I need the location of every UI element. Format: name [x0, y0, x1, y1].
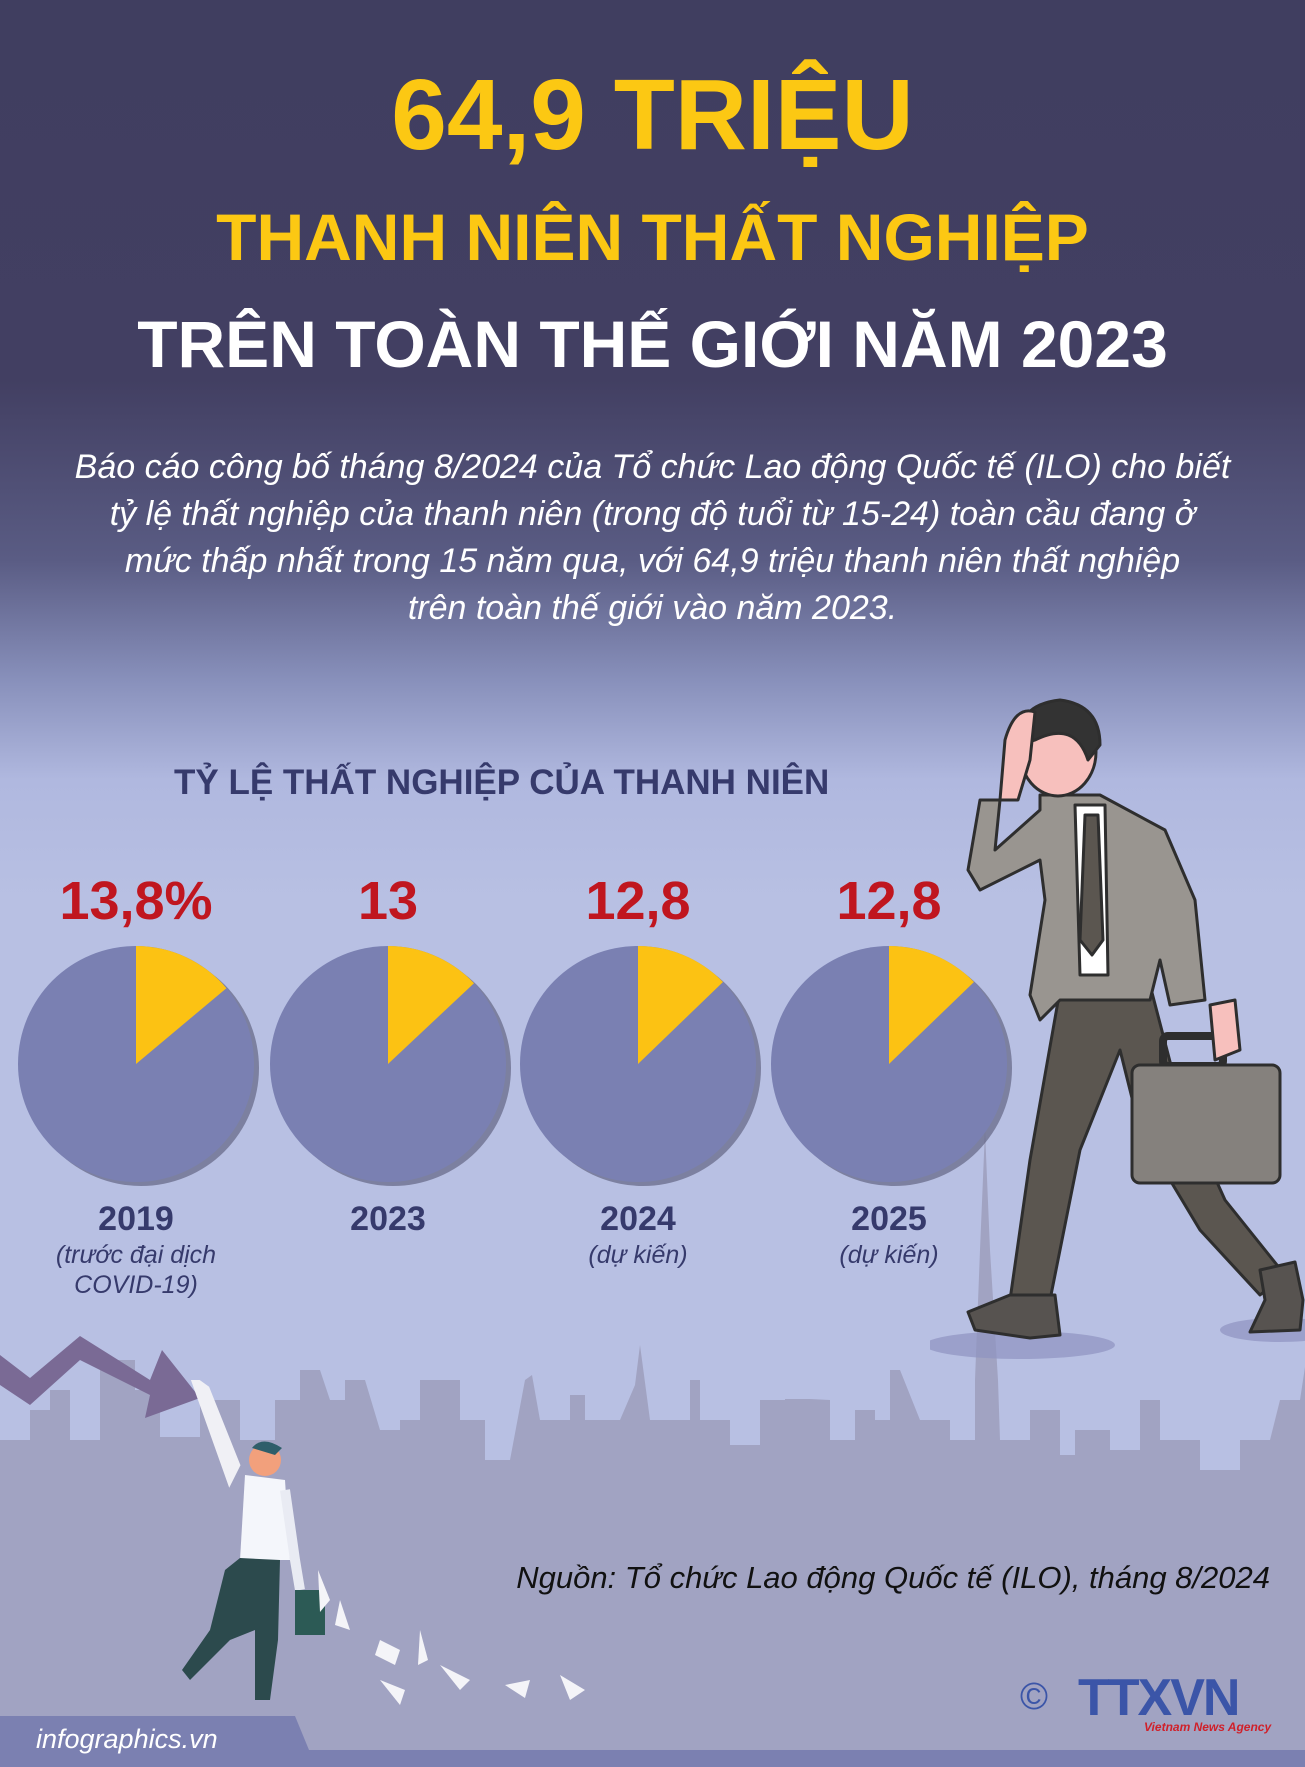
intro paragraph: mức thấp nhất trong 15 năm qua, với 64,9 triệu thanh niên thất nghiệp [125, 542, 1180, 580]
pie 2023: 13 [358, 871, 418, 931]
logo: TTXVN: Vietnam News Agency [1144, 1720, 1271, 1734]
intro paragraph: trên toàn thế giới vào năm 2023. [408, 589, 897, 627]
pie 2025: (dự kiến) [839, 1241, 939, 1269]
hand on head [1000, 711, 1035, 800]
subtitle yellow: THANH NIÊN THẤT NGHIỆP [216, 200, 1089, 274]
logo: TTXVN: © [1020, 1676, 1048, 1718]
pie 2023: 2023 [350, 1200, 426, 1238]
title: 64,9 TRIỆU [391, 59, 914, 171]
pie 2019: (trước đại dịch [56, 1241, 216, 1269]
pie 2024: 2024 [600, 1200, 676, 1238]
skyline [0, 1130, 1305, 1767]
briefcase [1163, 1036, 1223, 1066]
intro paragraph [75, 448, 1232, 627]
shoes [968, 1295, 1060, 1338]
pie 2025: 12,8 [836, 871, 942, 931]
pie 2024: (dự kiến) [588, 1241, 688, 1269]
pie 2019: 13,8% [59, 871, 213, 931]
pants [1010, 985, 1285, 1300]
head [1020, 708, 1096, 796]
intro paragraph: Báo cáo công bố tháng 8/2024 của Tổ chức Lao động Quốc tế (ILO) cho biết [75, 448, 1230, 486]
pie 2023 [270, 871, 511, 1238]
illustration: falling man [182, 1380, 585, 1705]
source note: Nguồn: Tổ chức Lao động Quốc tế (ILO), tháng 8/2024 [516, 1560, 1270, 1595]
intro paragraph: tỷ lệ thất nghiệp của thanh niên (trong độ tuổi từ 15-24) toàn cầu đang ở [110, 495, 1195, 533]
footer strip [0, 1716, 316, 1767]
illustration: worried businessman [930, 698, 1305, 1359]
logo: TTXVN: TTXVN [1078, 1669, 1238, 1727]
pie 2024 [520, 871, 761, 1269]
jacket [968, 795, 1205, 1020]
pie 2019: COVID-19) [74, 1271, 198, 1299]
pie 2019: 2019 [98, 1200, 174, 1238]
pie 2025 [771, 871, 1012, 1269]
pie 2019 [18, 871, 259, 1299]
footer site: infographics.vn [36, 1724, 218, 1754]
logo: TTXVN [1020, 1669, 1272, 1734]
shirt and tie [1075, 805, 1108, 975]
pie 2024: 12,8 [585, 871, 691, 931]
title: TRÊN TOÀN THẾ GIỚI NĂM 2023 [137, 307, 1168, 381]
pie charts [18, 871, 1012, 1299]
chart heading: TỶ LỆ THẤT NGHIỆP CỦA THANH NIÊN [174, 763, 829, 802]
arrow: falling trend [0, 1336, 198, 1418]
title [137, 59, 1168, 381]
pie 2025: 2025 [851, 1200, 927, 1238]
